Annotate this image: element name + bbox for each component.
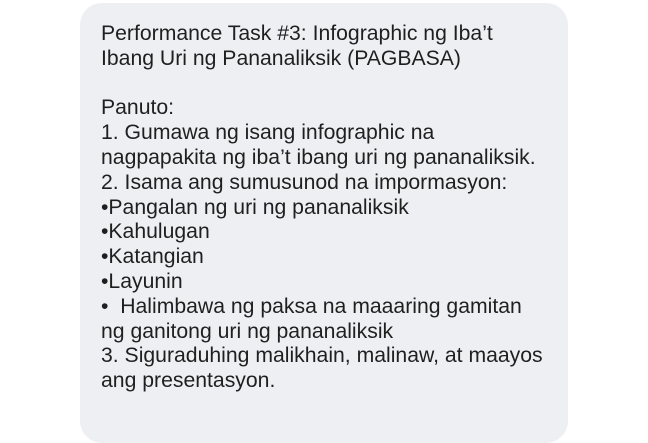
- instructions: ang presentasyon.: [101, 369, 275, 392]
- instructions: •Layunin: [101, 270, 183, 293]
- instructions: •Katangian: [101, 245, 204, 268]
- title: Ibang Uri ng Pananaliksik (PAGBASA): [101, 47, 461, 70]
- instructions: Panuto:: [101, 96, 174, 119]
- chat bubble: [80, 3, 568, 443]
- instructions: ng ganitong uri ng pananaliksik: [101, 320, 393, 343]
- title: [101, 22, 493, 70]
- instructions: 1. Gumawa ng isang infographic na: [101, 121, 434, 144]
- instructions: •Kahulugan: [101, 220, 210, 243]
- instructions: • Halimbawa ng paksa na maaaring gamitan: [101, 295, 522, 318]
- message text: [101, 22, 543, 392]
- instructions: •Pangalan ng uri ng pananaliksik: [101, 196, 409, 219]
- instructions: 2. Isama ang sumusunod na impormasyon:: [101, 171, 507, 194]
- instructions: [101, 96, 543, 392]
- instructions: nagpapakita ng iba’t ibang uri ng pananaliksik.: [101, 146, 536, 169]
- blank line: [101, 72, 543, 96]
- title: Performance Task #3: Infographic ng Iba’t: [101, 22, 493, 45]
- instructions: 3. Siguraduhing malikhain, malinaw, at maayos: [101, 344, 543, 367]
